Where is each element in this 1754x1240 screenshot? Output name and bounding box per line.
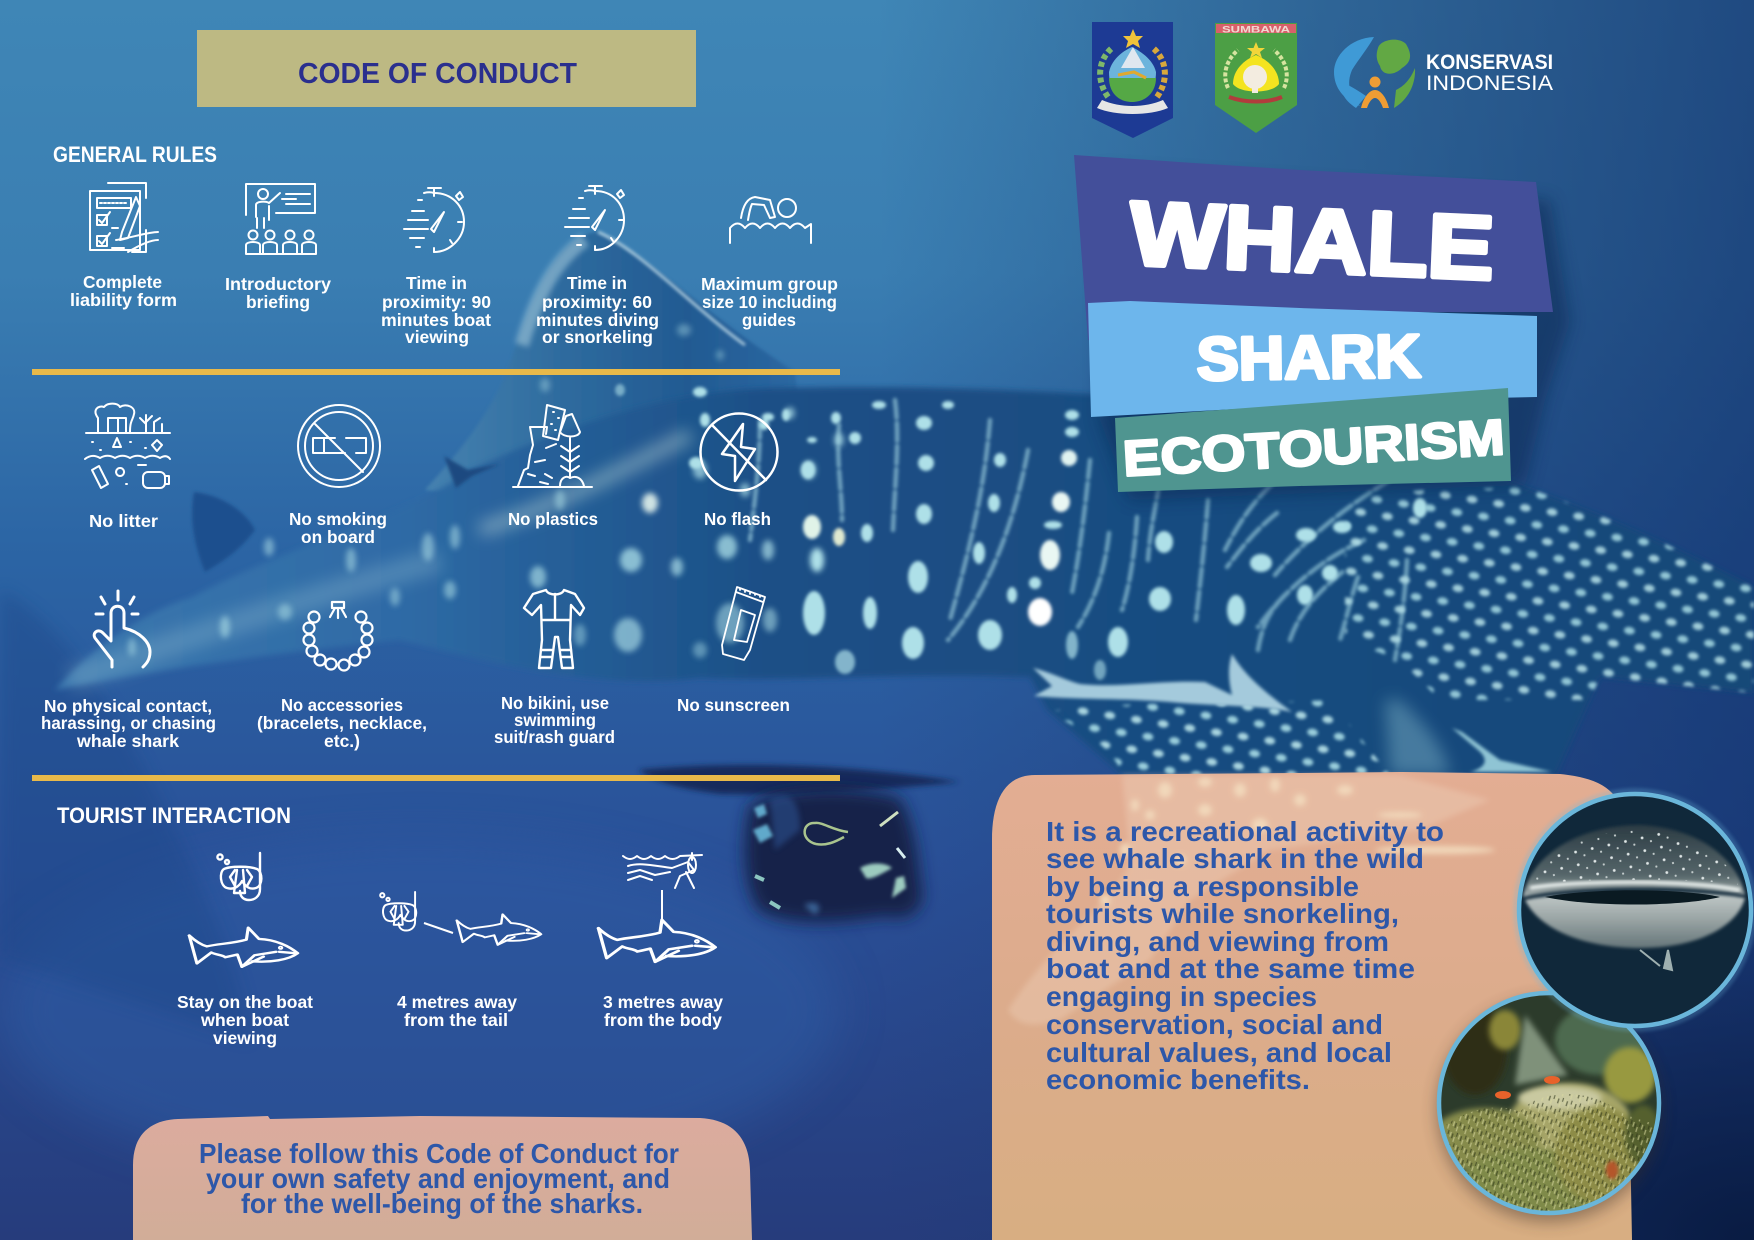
rule: time in proximity 60 minutes diving or snorkeling: proximity: 60 [542,292,652,312]
rule: no flash: No flash [704,509,771,529]
rule: no accessories: (bracelets, necklace, [257,713,427,733]
rule: no flash [700,414,778,529]
icon: form and pen [90,183,158,252]
remora fish [1033,654,1292,712]
logo: Konservasi Indonesia: INDONESIA [1426,72,1553,95]
description text: tourists while snorkeling, [1046,898,1399,929]
rule: no sunscreen: No sunscreen [677,695,790,715]
rule: no bikini [494,590,615,747]
logo: Konservasi Indonesia: KONSERVASI [1426,51,1553,74]
rule: no accessories: etc.) [324,731,360,751]
rule: time in proximity 90 minutes boat viewing [381,188,491,347]
shark dorsal fin [425,232,800,500]
title banner: whale shark ecotourism [1074,155,1570,500]
rule: no plastics: No plastics [508,509,598,529]
rule: time in proximity 90 minutes boat viewing: proximity: 90 [382,292,491,312]
description text: economic benefits. [1046,1064,1310,1095]
icon: stopwatch [565,186,624,250]
logo: Sumbawa crest [1215,23,1297,133]
rule: no accessories [257,602,427,751]
shark showing through panel [1008,775,1495,1024]
rule: complete liability form [70,183,177,310]
rule: complete liability form: Complete [83,272,162,292]
rule: time in proximity 60 minutes diving or snorkeling: or snorkeling [542,327,653,347]
icon: sunscreen tube [722,587,765,660]
section heading: general rules: GENERAL RULES [53,142,217,167]
rule: introductory briefing: briefing [246,292,310,312]
rule: time in proximity 60 minutes diving or snorkeling: minutes diving [536,310,659,330]
description text: It is a recreational activity to [1046,816,1444,847]
interaction: stay on the boat [177,853,313,1048]
section heading: tourist interaction: TOURIST INTERACTION [57,803,291,828]
rule: time in proximity 90 minutes boat viewing: Time in [406,273,467,293]
interaction: 4 metres from the tail [380,892,541,1030]
logo: Konservasi Indonesia [1334,37,1553,108]
rule: maximum group size: size 10 including [702,292,837,312]
shark spots, faded left side [128,324,844,658]
interaction: 4 metres from the tail: 4 metres away [397,992,517,1012]
word SHARK: SHARK [1196,322,1421,393]
rule: no smoking on board: on board [301,527,375,547]
rule: no physical contact: harassing, or chasing [41,713,216,733]
icon: no smoking sign [298,405,380,487]
shark stripes [750,400,1407,660]
rule: no bikini: suit/rash guard [494,727,615,747]
rule: time in proximity 90 minutes boat viewing: minutes boat [381,310,491,330]
rule: no litter [85,404,170,531]
coral texture [1445,1094,1654,1211]
icon: swimmer [730,197,811,243]
rule: maximum group size: guides [742,310,796,330]
icon: bead bracelet [304,602,372,670]
icon: shark [457,914,541,945]
interaction: 3 metres from the body [598,853,723,1030]
description text: conservation, social and [1046,1009,1383,1040]
photo: whale shark head-on [1510,788,1754,1032]
rule: maximum group size: Maximum group [701,274,838,294]
icon: stopwatch [404,188,464,252]
description text: cultural values, and local [1046,1037,1392,1068]
icon: litter in sea [85,404,170,488]
panel: closing message: for the well-being of the sharks. [241,1188,643,1219]
dark blue ribbon [1074,155,1553,345]
word WHALE: WHALE [1128,184,1496,299]
icon: plastic on reef [513,405,592,487]
panel: description [992,772,1632,1240]
teal ribbon [1115,388,1511,492]
panel: closing message [133,1116,752,1240]
rule: time in proximity 90 minutes boat viewing: viewing [405,327,469,347]
second remora fish [1452,728,1552,772]
scuba diver [638,765,960,922]
rule: time in proximity 60 minutes diving or snorkeling: Time in [567,273,627,293]
rule: complete liability form: liability form [70,290,177,310]
logo: Sumbawa crest: SUMBAWA [1222,24,1290,36]
icon: pointing finger [94,591,150,667]
rule: no physical contact: No physical contact, [44,696,212,716]
interaction: 3 metres from the body: from the body [604,1010,722,1030]
heading box: code of conduct: CODE OF CONDUCT [298,58,577,90]
rule: no physical contact: whale shark [76,731,179,751]
rule: introductory briefing [225,184,331,312]
rule: no physical contact [41,591,216,751]
rule: no accessories: No accessories [281,695,403,715]
pectoral fin spots [1047,700,1390,775]
description text: see whale shark in the wild [1046,843,1424,874]
description text [1046,816,1444,1095]
interaction: stay on the boat: viewing [213,1028,277,1048]
logo: provincial crest [1092,22,1173,138]
panel: closing message: Please follow this Code of Conduct for [199,1138,679,1169]
shark spots [615,384,1427,680]
icon: shark [598,920,715,962]
icon: swimmer at surface [623,853,702,888]
clownfish [1495,1091,1511,1099]
icon: teacher at board [246,184,316,254]
rule: time in proximity 60 minutes diving or snorkeling [536,186,659,347]
second small fin [444,456,500,488]
rule: no smoking on board [289,405,387,547]
description text: by being a responsible [1046,871,1359,902]
shark head dense spots [1345,487,1754,700]
icon: snorkel mask [380,892,416,931]
description text: engaging in species [1046,981,1317,1012]
icon: wetsuit [524,590,584,668]
description text: diving, and viewing from [1046,926,1389,957]
word ECOTOURISM: ECOTOURISM [1121,409,1506,487]
interaction: stay on the boat: when boat [200,1010,289,1030]
photo: coral and clownfish [1430,990,1670,1232]
interaction: stay on the boat: Stay on the boat [177,992,313,1012]
rule: maximum group size [701,197,838,330]
rule: no plastics [508,405,598,529]
icon: shark [189,928,298,967]
shark body [55,387,1754,775]
description text: boat and at the same time [1046,953,1415,984]
rule: no litter: No litter [89,511,158,531]
small back fin [192,492,255,572]
icon: no flash sign [700,414,778,490]
rule: no smoking on board: No smoking [289,509,387,529]
rule: introductory briefing: Introductory [225,274,331,294]
interaction: 4 metres from the tail: from the tail [404,1010,508,1030]
heading box: code of conduct [197,30,696,107]
icon: snorkel mask [217,853,261,900]
rule: no bikini: swimming [514,710,596,730]
shark light ridge [480,435,690,530]
rule: no sunscreen [677,587,790,715]
interaction: 3 metres from the body: 3 metres away [603,992,723,1012]
light blue ribbon [1088,301,1537,417]
rule: no bikini: No bikini, use [501,693,609,713]
panel: closing message: your own safety and enjoyment, and [206,1163,670,1194]
